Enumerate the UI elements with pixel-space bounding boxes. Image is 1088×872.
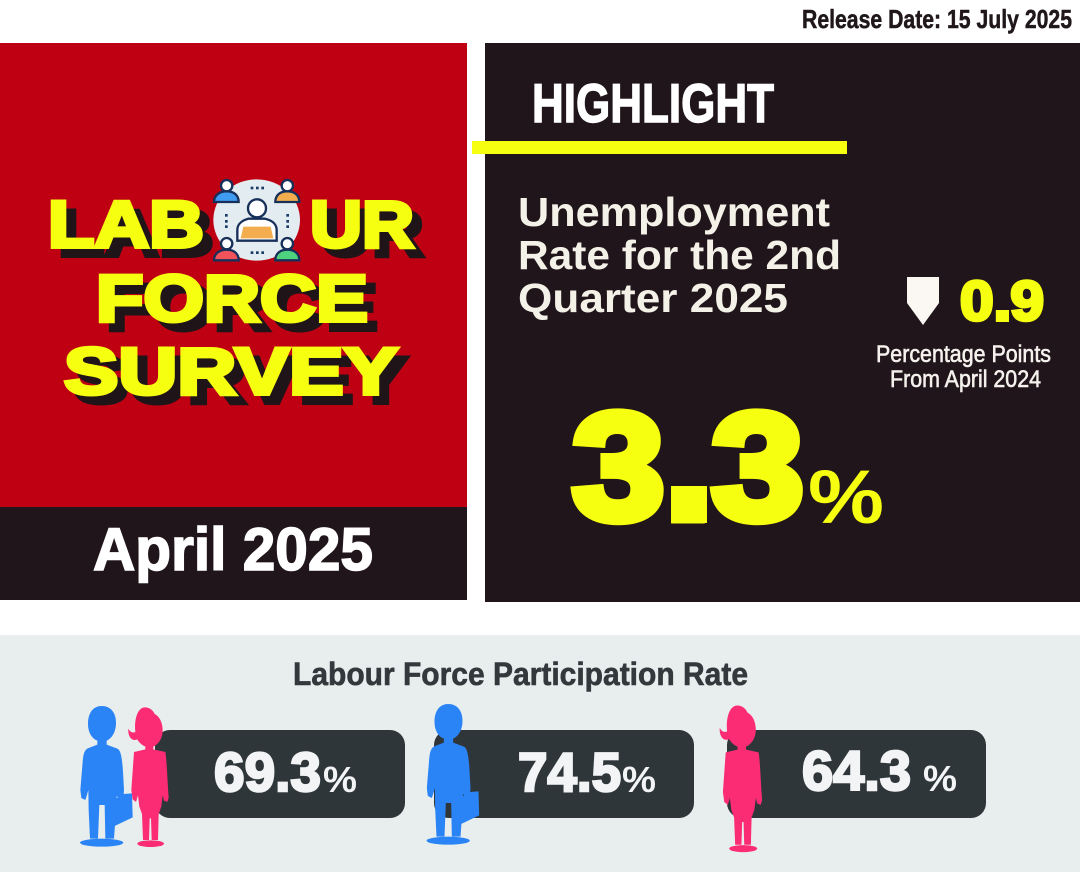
title shadow: SURVEY: [74, 343, 408, 417]
value: total: %: [323, 759, 357, 800]
title shadow: UR: [320, 196, 424, 270]
title: SURVEY: [64, 334, 398, 408]
icon: man: [426, 704, 479, 845]
month band: [0, 507, 467, 600]
title shadow: [58, 196, 424, 417]
unemployment heading: [518, 189, 841, 321]
group: female: [720, 706, 986, 852]
value: total: 69.3: [214, 741, 321, 803]
title shadow: FORCE: [106, 270, 378, 344]
value: male: 74.5: [518, 741, 621, 803]
change note: Percentage Points: [876, 341, 1051, 368]
title: [48, 187, 414, 408]
highlight heading: HIGHLIGHT: [532, 72, 774, 134]
panel: highlight: [472, 43, 1080, 602]
change note: From April 2024: [890, 366, 1041, 393]
unemployment heading: Quarter 2025: [518, 275, 788, 321]
month band: April 2025: [93, 516, 373, 583]
value: male: %: [622, 759, 656, 800]
yellow underline: [472, 141, 847, 154]
value: female: %: [923, 758, 957, 799]
unemployment rate: 3.3: [572, 382, 804, 552]
title: FORCE: [96, 261, 368, 335]
icon: down arrow: [907, 277, 939, 325]
group: male: [426, 704, 694, 845]
panel: participation rate: [0, 635, 1080, 872]
change note: [876, 341, 1051, 393]
title: UR: [310, 187, 414, 261]
unemployment rate: [572, 382, 884, 552]
unemployment heading: Unemployment: [518, 189, 830, 235]
unemployment heading: Rate for the 2nd: [518, 232, 841, 278]
change value: 0.9: [960, 269, 1044, 332]
icon: people network: [213, 179, 300, 261]
panel: survey title: [0, 43, 467, 507]
unemployment rate: %: [808, 455, 884, 540]
participation heading: Labour Force Participation Rate: [293, 656, 748, 692]
icon: man and woman: [80, 706, 169, 847]
value: female: 64.3: [802, 739, 911, 802]
group: total: [80, 706, 405, 847]
icon: woman: [720, 706, 762, 852]
title: LAB: [48, 187, 204, 261]
title shadow: LAB: [58, 196, 214, 270]
